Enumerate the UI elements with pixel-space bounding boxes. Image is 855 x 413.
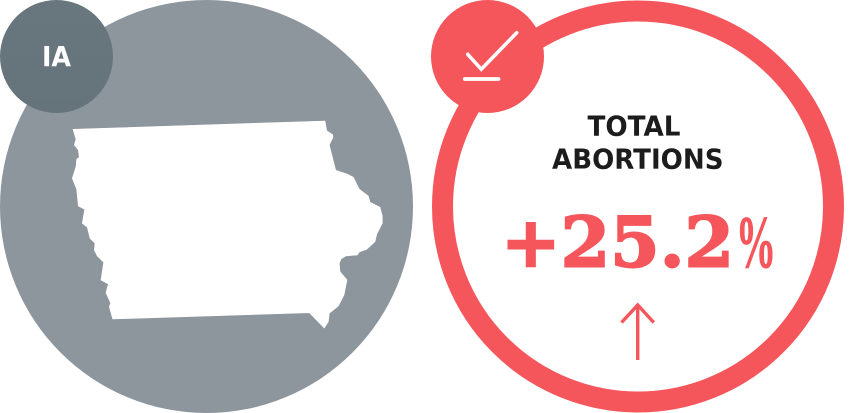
heading (552, 110, 724, 176)
grey circle background (0, 0, 413, 413)
badge circle (0, 0, 113, 113)
state badge (0, 0, 113, 113)
red ring (442, 11, 834, 402)
badge label: IA (42, 40, 71, 73)
heading: ABORTIONS (552, 142, 724, 176)
map: Iowa outline (72, 121, 382, 328)
arrow: up (622, 304, 654, 360)
panel: state map (0, 0, 413, 413)
percentage value: % (736, 202, 776, 284)
panel: total abortions (431, 0, 834, 402)
icon: check mark badge (431, 0, 544, 113)
heading: TOTAL (588, 110, 681, 142)
percentage value: +25.2 (501, 202, 734, 284)
